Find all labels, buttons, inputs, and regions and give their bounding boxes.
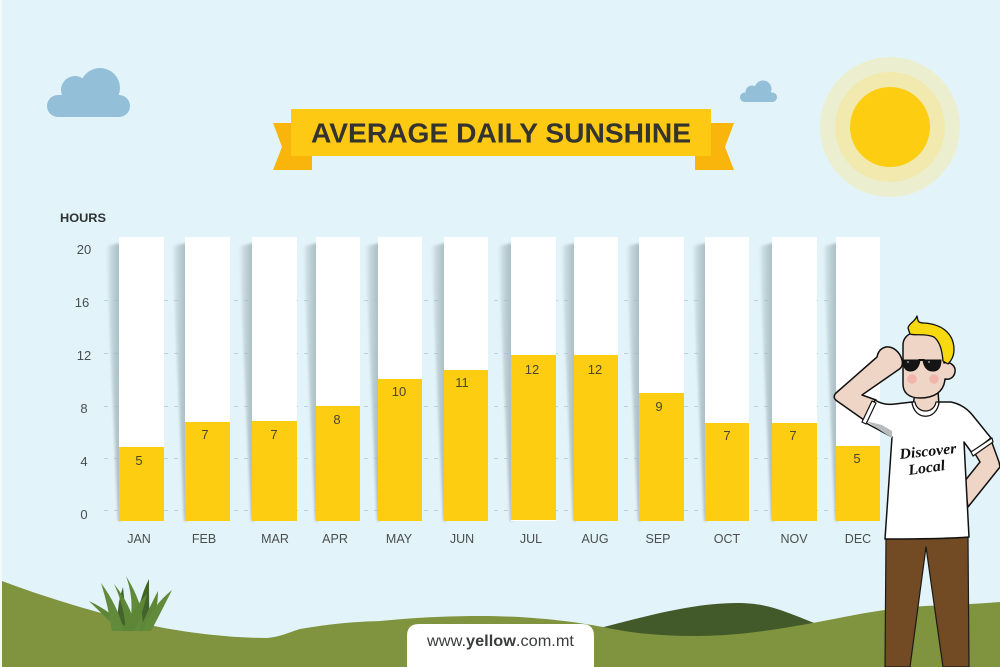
bar: April 8 hours (316, 237, 360, 521)
title: AVERAGE DAILY SUNSHINE (311, 118, 691, 148)
bar: May 10 hours (378, 237, 422, 521)
left raised arm (834, 347, 902, 420)
bar: April 8 hours: 8 (333, 412, 341, 427)
y-axis labels: 12 (77, 348, 91, 363)
bar: November 7 hours (772, 237, 817, 521)
shirt text: Discover (898, 441, 957, 463)
y-axis labels: 0 (80, 507, 88, 522)
x-axis month labels: SEP (645, 532, 671, 546)
cheeks (907, 374, 939, 384)
x-axis month labels: FEB (192, 532, 216, 546)
ribbon left tail (273, 123, 312, 170)
bar: August 12 hours: 12 (588, 362, 602, 377)
ribbon main band (291, 109, 711, 156)
shirt shadow (866, 421, 892, 438)
website tag (407, 624, 594, 667)
bar: July 12 hours: 12 (525, 362, 539, 377)
bar: March 7 hours (252, 237, 297, 521)
bar: November 7 hours: 7 (789, 428, 797, 443)
x-axis month labels: JUL (520, 532, 542, 546)
ribbon right tail (695, 123, 734, 170)
bar: May 10 hours: 10 (392, 384, 406, 399)
y-axis labels: 16 (75, 295, 89, 310)
bar: February 7 hours: 7 (201, 427, 209, 442)
bar: December 5 hours: 5 (853, 451, 861, 466)
x-axis month labels: MAY (386, 532, 413, 546)
bar: March 7 hours: 7 (270, 427, 278, 442)
bar: October 7 hours: 7 (723, 428, 731, 443)
x-axis month labels: JAN (127, 532, 151, 546)
dark background hill (600, 603, 822, 650)
bar: September 9 hours: 9 (655, 399, 663, 414)
bar: January 5 hours (119, 237, 164, 521)
x-axis month labels: APR (322, 532, 348, 546)
y-axis labels (75, 242, 91, 522)
bar: August 12 hours (574, 237, 618, 521)
x-axis month labels: JUN (450, 532, 474, 546)
bar chart (104, 237, 880, 521)
bar: February 7 hours (185, 237, 230, 521)
website tag: www.yellow.com.mt (426, 633, 575, 650)
y-axis labels: 4 (80, 454, 88, 469)
x-axis month labels: AUG (581, 532, 609, 546)
bar: October 7 hours (705, 237, 749, 521)
neck (913, 390, 939, 412)
bar: June 11 hours (444, 237, 488, 521)
x-axis month labels (127, 532, 871, 546)
right sleeve cuff (971, 438, 993, 456)
x-axis month labels: MAR (261, 532, 289, 546)
icon: large cloud (47, 68, 130, 117)
y-axis labels: 20 (77, 242, 91, 257)
y-axis title: HOURS (60, 213, 106, 225)
collar (912, 402, 939, 416)
trousers (885, 536, 969, 667)
head (903, 331, 955, 398)
t-shirt (864, 400, 991, 539)
bar: September 9 hours (639, 237, 684, 521)
bar: January 5 hours: 5 (135, 453, 143, 468)
x-axis month labels: OCT (714, 532, 741, 546)
shirt text: Local (906, 458, 947, 479)
icon: grass tuft (89, 576, 172, 631)
foreground green hills (2, 581, 1000, 667)
bar: December 5 hours (836, 237, 880, 521)
x-axis month labels: NOV (780, 532, 808, 546)
hair (908, 316, 954, 364)
sunglasses (903, 360, 941, 371)
x-axis month labels: DEC (845, 532, 871, 546)
title banner (273, 109, 734, 170)
bar: June 11 hours: 11 (455, 375, 469, 390)
icon: small cloud (740, 80, 777, 102)
bar: July 12 hours (511, 237, 556, 521)
icon: sun (820, 57, 960, 197)
character: man with sunglasses (834, 316, 1000, 667)
left sleeve cuff (862, 401, 876, 424)
y-axis labels: 8 (80, 401, 88, 416)
right arm (964, 440, 1000, 507)
shirt text (898, 441, 957, 479)
